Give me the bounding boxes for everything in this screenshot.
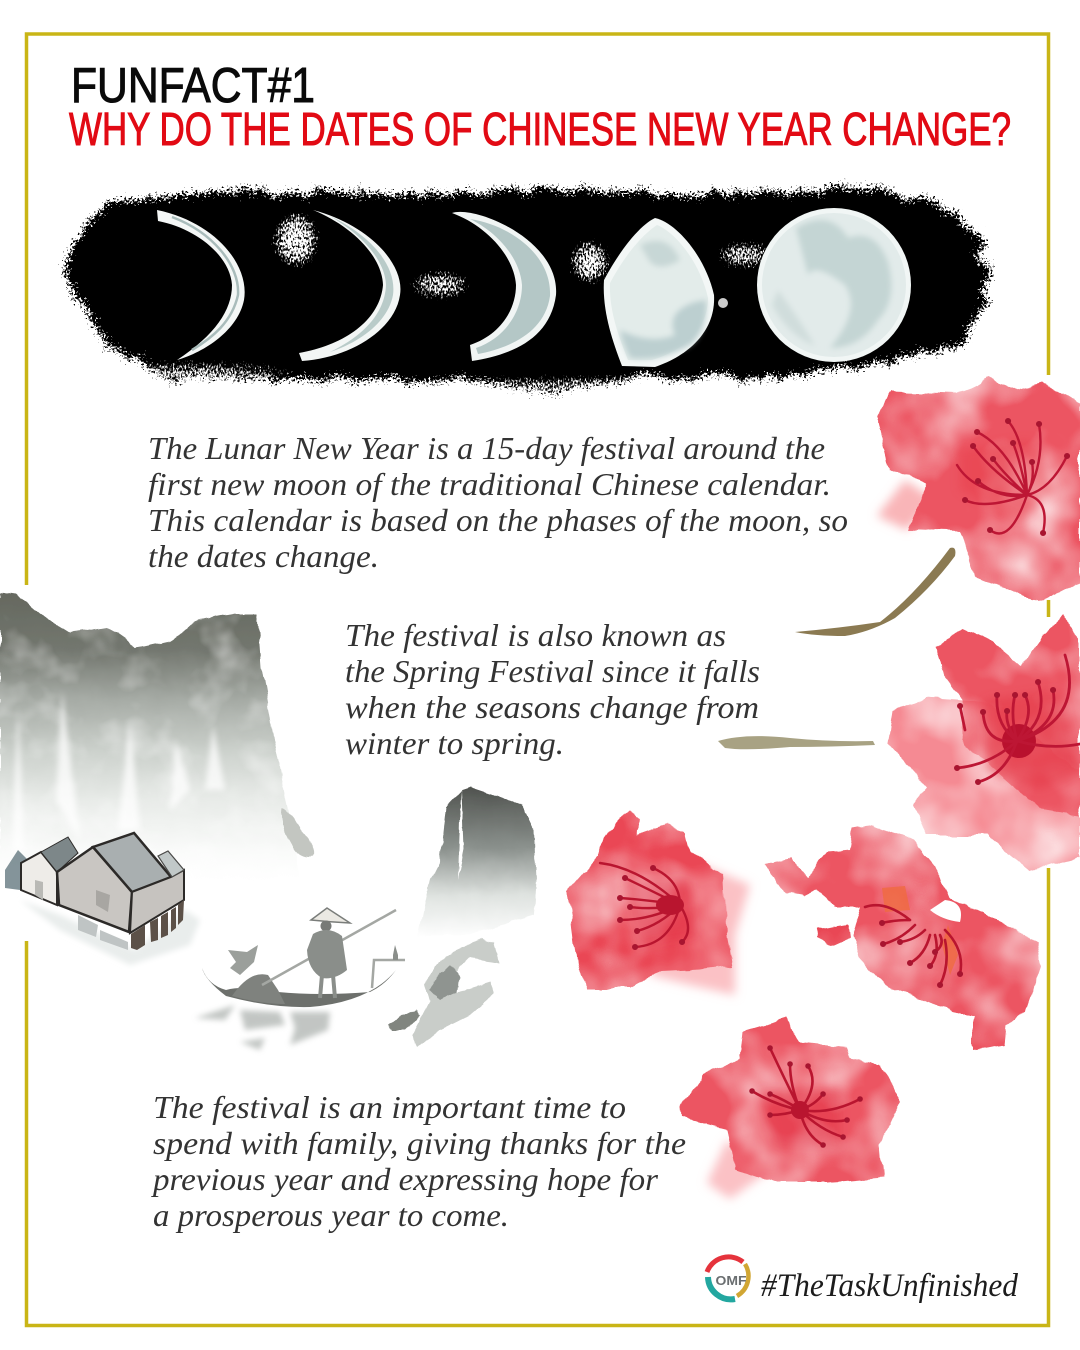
flower: centre left xyxy=(567,809,750,995)
moon: full xyxy=(757,208,911,362)
text block: lunar new year xyxy=(148,430,848,574)
text block: lunar new year: The Lunar New Year is a 15-day festival around the xyxy=(148,430,825,466)
footer: hashtag: #TheTaskUnfinished xyxy=(761,1268,1018,1304)
text block: spring festival: the Spring Festival since it falls xyxy=(345,653,760,689)
flower: middle right xyxy=(888,617,1080,871)
right rock formation xyxy=(418,787,536,938)
text block: spring festival: The festival is also known as xyxy=(345,617,726,653)
flower: top right xyxy=(877,378,1080,600)
title xyxy=(69,59,1011,155)
text block: spring festival: winter to spring. xyxy=(345,725,564,761)
text block: family time xyxy=(151,1089,686,1233)
house xyxy=(5,833,200,965)
text block: family time: previous year and expressing hope for xyxy=(151,1161,659,1197)
heading: fun fact number: FUNFACT#1 xyxy=(71,59,315,113)
text block: family time: spend with family, giving thanks for the xyxy=(153,1125,686,1161)
flower: lower xyxy=(682,1018,900,1199)
moon: crescent xyxy=(299,210,400,361)
landscape illustration xyxy=(0,593,536,1050)
text block: family time: The festival is an important time to xyxy=(153,1089,626,1125)
mountain cliff wash xyxy=(0,593,315,880)
text block: lunar new year: first new moon of the traditional Chinese calendar. xyxy=(148,466,831,502)
text block: lunar new year: the dates change. xyxy=(148,538,379,574)
text block: spring festival: when the seasons change from xyxy=(345,689,759,725)
fisherman on boat xyxy=(195,908,405,1050)
text block: spring festival xyxy=(345,617,760,761)
moon: gibbous xyxy=(604,218,714,367)
text block: family time: a prosperous year to come. xyxy=(153,1197,509,1233)
moon: waxing crescent wide xyxy=(452,212,556,361)
ink brush band with moon phases xyxy=(63,188,988,400)
branch: lower xyxy=(718,736,875,749)
branch: upper xyxy=(795,548,955,636)
text block: lunar new year: This calendar is based on the phases of the moon, so xyxy=(148,502,848,538)
lower rock wash xyxy=(388,938,499,1048)
footer: OMF logo xyxy=(707,1257,748,1299)
moon: thin waxing crescent xyxy=(157,210,245,360)
flower: centre right xyxy=(763,825,1042,1050)
footer: OMF logo: OMF xyxy=(716,1273,747,1288)
black ink brush stroke xyxy=(63,188,988,400)
